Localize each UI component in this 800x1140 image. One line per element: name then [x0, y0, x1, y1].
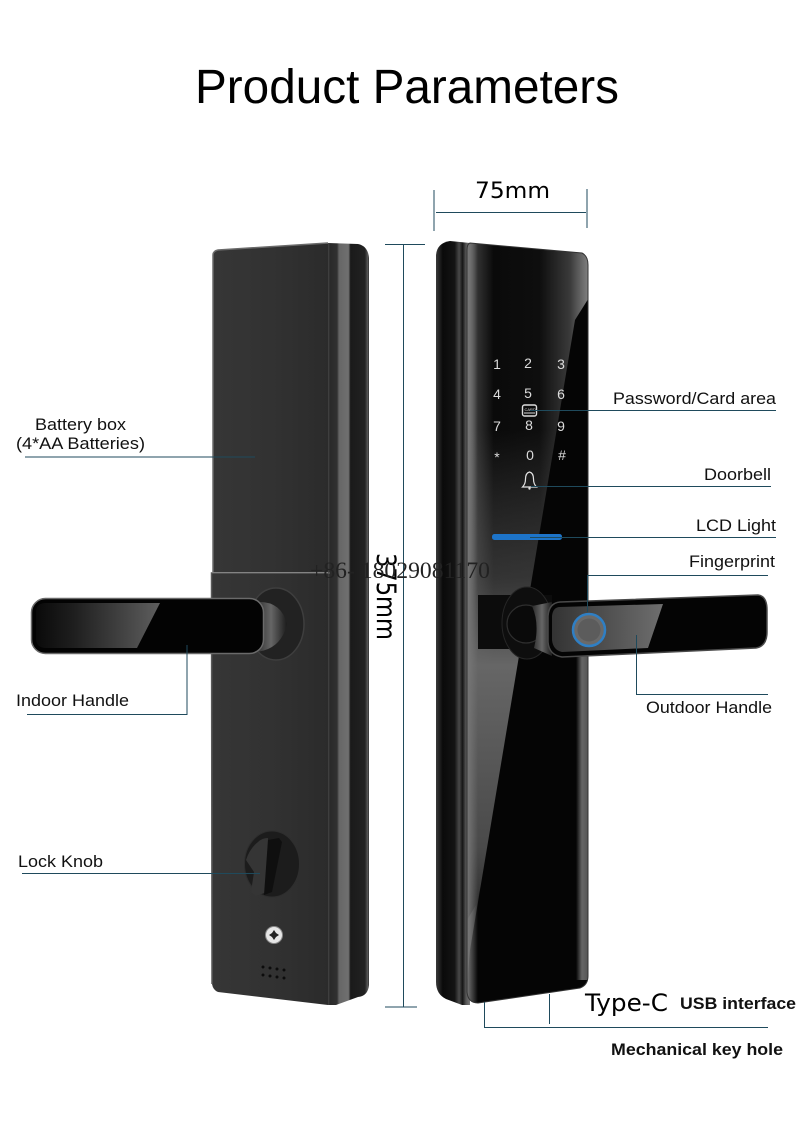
black glass area — [465, 296, 590, 1010]
callout: LCD light: LCD Light — [696, 516, 776, 535]
callout: type-c and mechanical key hole — [484, 989, 796, 1059]
keypad: 9 — [557, 418, 565, 434]
side rail of indoor lock — [328, 243, 369, 1005]
icon: doorbell — [522, 472, 536, 490]
Type-C label: Type-C — [584, 989, 668, 1017]
callout: outdoor handle — [636, 635, 772, 717]
callout: indoor handle: Indoor Handle — [16, 691, 129, 710]
key cylinder screw — [266, 926, 282, 944]
diagonal glass reflection — [468, 455, 551, 916]
callout: indoor handle — [16, 645, 187, 714]
outdoor rose — [502, 587, 552, 659]
indoor handle with rose — [32, 588, 304, 660]
keypad: 2 — [524, 355, 532, 371]
keypad: * — [494, 449, 500, 465]
outdoor handle glare — [552, 604, 663, 652]
LCD light bar — [492, 534, 562, 540]
keypad: 3 — [557, 356, 565, 372]
keypad: 8 — [525, 417, 533, 433]
indoor lock body (left) — [211, 243, 369, 1005]
glass base gradient — [470, 244, 588, 950]
keypad — [493, 355, 566, 465]
outdoor rose ring — [507, 605, 545, 643]
indoor handle lever — [32, 598, 264, 654]
callout: battery box: Battery box — [35, 415, 127, 434]
side rail of outdoor lock — [436, 241, 470, 1005]
callout: password/card area: Password/Card area — [613, 389, 777, 408]
indoor handle neck — [255, 602, 287, 652]
fingerprint sensor — [573, 614, 605, 646]
keypad: 5 — [524, 385, 532, 401]
lower plate left edge — [212, 573, 330, 984]
callout: fingerprint — [588, 552, 775, 612]
lock knob — [244, 831, 300, 897]
outdoor backplate — [478, 595, 552, 649]
dimension: height 375mm — [370, 244, 425, 1007]
outdoor lock body (right) — [436, 240, 595, 1010]
glass outline — [467, 243, 588, 1003]
callout: battery box: (4*AA Batteries) — [16, 434, 145, 453]
USB interface label: USB interface — [680, 994, 796, 1013]
title: Product Parameters — [195, 61, 619, 114]
keypad: 4 — [493, 386, 501, 402]
battery box cover — [213, 243, 328, 572]
outdoor lever — [548, 595, 767, 657]
width value: 75mm — [475, 179, 550, 204]
keypad: 7 — [493, 418, 501, 434]
callout: doorbell: Doorbell — [704, 465, 771, 484]
callout: outdoor handle: Outdoor Handle — [646, 698, 772, 717]
icon: card reader: CARD — [524, 407, 536, 412]
right edge shine on glass — [576, 656, 588, 980]
indoor handle glare — [36, 603, 160, 648]
height tick marks and line — [385, 244, 425, 1007]
left edge shine on glass — [468, 244, 477, 1002]
lower front plate — [211, 573, 328, 1005]
outdoor neck — [532, 602, 552, 656]
callout: fingerprint: Fingerprint — [689, 552, 775, 571]
keypad: 1 — [493, 356, 501, 372]
callout: battery box — [16, 415, 255, 457]
width tick marks and line — [434, 189, 587, 231]
height value: 375mm — [370, 553, 401, 640]
keypad: # — [558, 447, 566, 463]
outdoor handle with rose — [478, 587, 767, 659]
icon: card reader — [522, 405, 536, 416]
dimension: width 75mm — [434, 179, 587, 231]
watermark phone number: +86- 18029081170 — [310, 558, 490, 583]
keypad: 6 — [557, 386, 565, 402]
indoor handle rose — [248, 588, 304, 660]
battery cover edge — [213, 243, 328, 572]
mechanical key hole label: Mechanical key hole — [611, 1040, 783, 1059]
keypad: 0 — [526, 447, 534, 463]
speaker holes — [262, 966, 286, 980]
callout: lock knob: Lock Knob — [18, 852, 103, 871]
glass front panel — [465, 240, 595, 1010]
